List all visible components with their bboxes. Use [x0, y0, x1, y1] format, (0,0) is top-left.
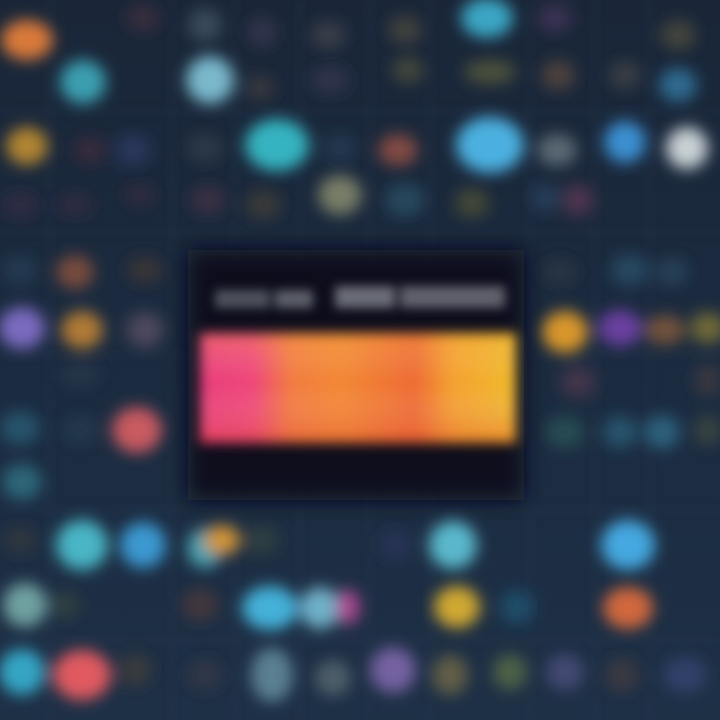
panel heading bar	[215, 286, 505, 308]
row of icons below panel	[4, 520, 655, 570]
heat gradient bar	[200, 333, 516, 443]
top row of blurred icons	[1, 0, 696, 60]
fourth row of blurred icons	[2, 175, 594, 220]
second row of blurred icons	[60, 56, 697, 104]
bottom row of icons	[0, 647, 707, 702]
central dark panel	[188, 250, 524, 500]
right column icons	[542, 254, 720, 449]
left column icons	[0, 255, 164, 500]
lower row of icons	[3, 583, 653, 630]
third row of blurred icons	[6, 117, 708, 173]
